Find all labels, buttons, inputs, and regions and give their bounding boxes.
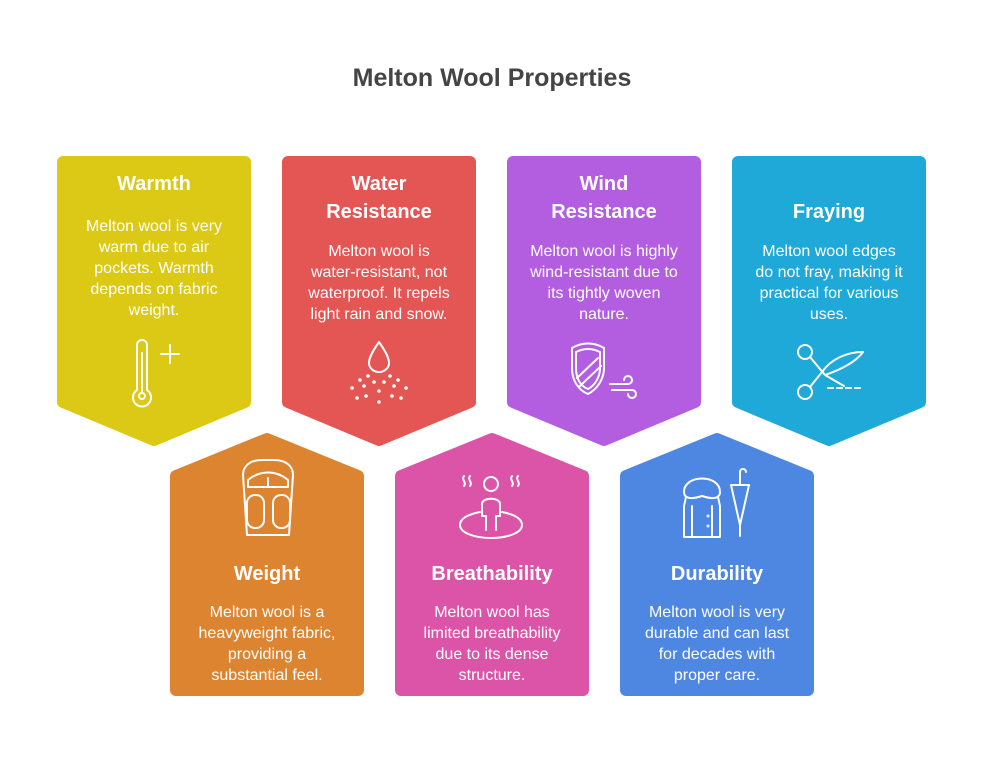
panel: durability: Durability [671, 563, 764, 585]
icon: scale [243, 460, 293, 535]
panel: wind resistance: its tightly woven [548, 285, 660, 302]
panel: breathability: due to its dense [436, 646, 549, 663]
panel: fraying: Fraying [793, 201, 865, 223]
panel: weight [176, 439, 358, 690]
panel: warmth: weight. [128, 302, 179, 319]
panel: breathability: limited breathability [424, 625, 560, 642]
panel: weight: substantial feel. [211, 667, 323, 684]
panel: warmth: warm due to air [98, 239, 210, 256]
panel: wind resistance [513, 162, 695, 440]
panel: wind resistance: Wind [580, 173, 628, 195]
panel: wind resistance: nature. [579, 306, 629, 323]
panel: breathability: Breathability [431, 563, 553, 585]
icon: scissors [798, 345, 863, 399]
panel: fraying: do not fray, making it [755, 264, 903, 281]
panel: wind resistance: wind-resistant due to [529, 264, 678, 281]
panel: water resistance: waterproof. It repels [307, 285, 450, 302]
panel: wind resistance: Resistance [551, 201, 657, 223]
icon: water drop [350, 342, 408, 404]
panel: breathability: structure. [459, 667, 525, 684]
panel: breathability: Melton wool has [434, 604, 550, 621]
panel: warmth: pockets. Warmth [94, 260, 214, 277]
panel: fraying: practical for various [760, 285, 898, 302]
panel: warmth: Melton wool is very [86, 218, 222, 235]
panel: water resistance: Water [352, 173, 407, 195]
panel: breathability [401, 439, 583, 690]
panel: weight: providing a [228, 646, 306, 663]
panel: water resistance: water-resistant, not [310, 264, 448, 281]
icon: shield with wind [572, 344, 636, 398]
panel: weight: Weight [234, 563, 300, 585]
panel: water resistance [288, 162, 470, 440]
panel: warmth: depends on fabric [90, 281, 218, 298]
panel: weight: heavyweight fabric, [199, 625, 335, 642]
panel: warmth [63, 162, 245, 440]
panel: durability: durable and can last [645, 625, 790, 642]
panel: warmth: Warmth [117, 173, 191, 195]
panel: durability [626, 439, 808, 690]
icon: raincoat and umbrella [684, 469, 749, 537]
icon: person with steam [460, 476, 522, 538]
panel: durability: Melton wool is very [649, 604, 785, 621]
panel: fraying [738, 162, 920, 440]
icon: thermometer [133, 340, 179, 406]
panel: durability: proper care. [674, 667, 760, 684]
panel: fraying: Melton wool edges [762, 243, 896, 260]
panel: water resistance: light rain and snow. [311, 306, 447, 323]
panel: water resistance: Resistance [326, 201, 432, 223]
panel: wind resistance: Melton wool is highly [530, 243, 678, 260]
title: Melton Wool Properties [353, 64, 631, 92]
panel: water resistance: Melton wool is [328, 243, 430, 260]
panel: weight: Melton wool is a [210, 604, 324, 621]
panel: durability: for decades with [659, 646, 775, 663]
panel: fraying: uses. [810, 306, 848, 323]
